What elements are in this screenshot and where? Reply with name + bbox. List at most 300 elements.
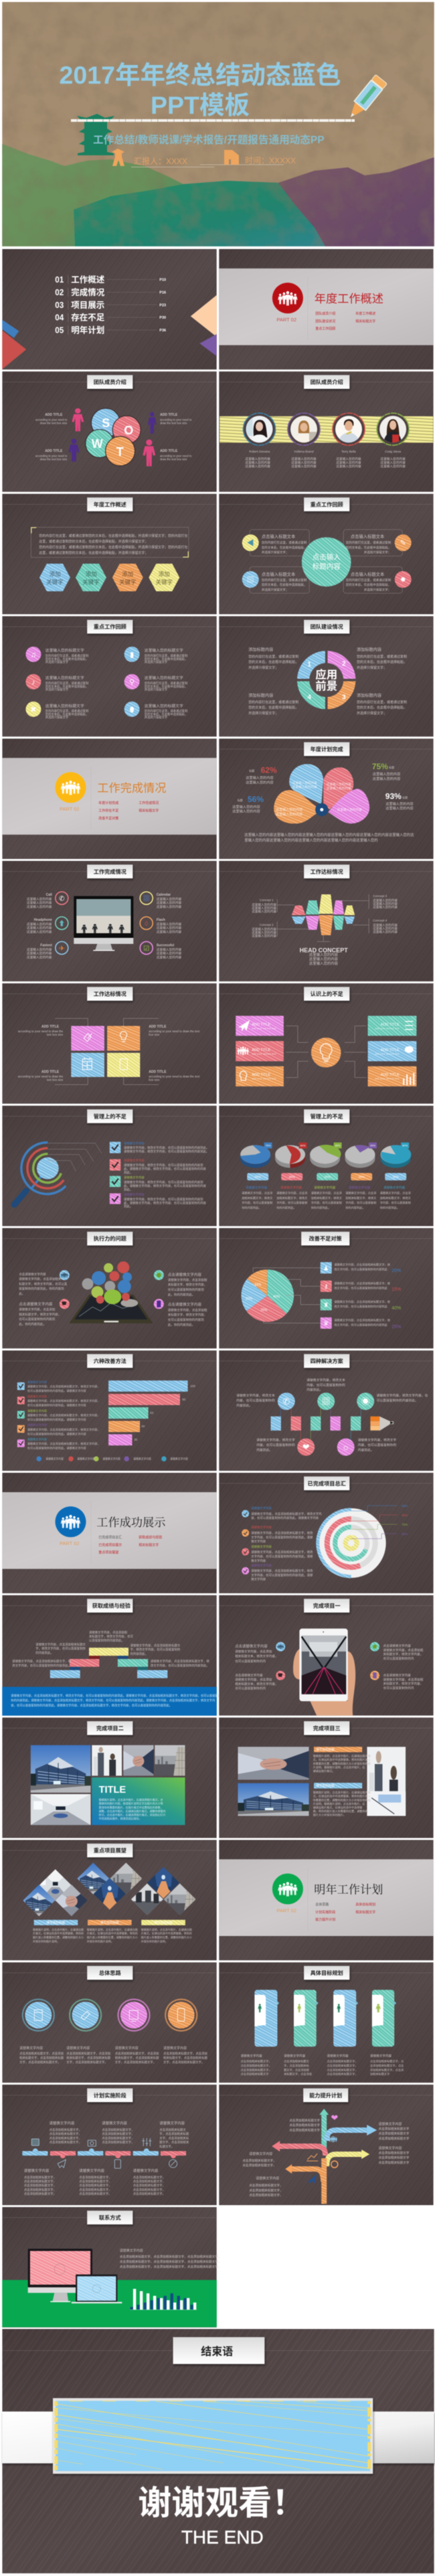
part list: 年度计划完成: [98, 801, 118, 805]
heading: 执行力的问题: [94, 1235, 126, 1242]
keyword hexagons: 关键字: [46, 579, 64, 586]
heading: 工作达标情况: [94, 991, 127, 997]
contact text: 点击添加相关标题文字，点击添加相关标题文字，点击添加相关标题文字，: [120, 2255, 221, 2258]
reporter text: 汇报人：XXXX: [134, 156, 187, 166]
percent callouts: 标题: [249, 769, 254, 773]
pie chart: 20%: [246, 1297, 253, 1301]
panel: improvement pie slide: [219, 1228, 434, 1348]
member names and text: Craig Steva: [385, 450, 402, 453]
part list: 能力提升计划: [315, 1917, 335, 1922]
hand holding device: [293, 1629, 355, 1716]
panel: awareness shortfalls slide: [219, 983, 434, 1104]
six text blocks: 您的文本后，在此框中选择粘贴，: [46, 684, 88, 689]
left text blocks: 这里输入您的内容: [27, 951, 52, 956]
heading: 完成项目一: [313, 1603, 341, 1609]
signpost text: [242, 2118, 410, 2198]
portrait four: [377, 413, 409, 445]
four text blocks: 您的内容打在这里，或者通过复制: [357, 655, 407, 659]
item text: 请替换文字内容，点击添加相关标题文字，修改文字内容，: [27, 1428, 100, 1431]
icon: pencil: [345, 74, 387, 122]
swot diagram: W: [92, 437, 103, 451]
right text: 请替换文字内容，点击添加相: [168, 1278, 207, 1281]
right text blocks: 这里输入您的内容: [157, 904, 182, 909]
box text: 并选择只保留文字；: [262, 550, 288, 555]
four text blocks: 您的内容打在这里，或者通过复制: [248, 655, 298, 659]
heading: [304, 620, 349, 633]
right text blocks: 这里输入您的内容: [157, 926, 182, 931]
caption text: 替换图片说明，点击选中图片，右键调出图: [33, 1928, 84, 1931]
item text: 请替换文字内容: [27, 1423, 47, 1427]
lower text: 点击添加相关标题文字，: [133, 2179, 165, 2184]
part title: 明年工作计划: [314, 1882, 383, 1896]
box text: 点击输入标题文本: [351, 571, 385, 577]
icons: outlined circles: [56, 892, 153, 955]
icons: solution badges: ❤: [302, 1442, 310, 1452]
lower text: 点击添加相关标题文字，: [24, 2187, 56, 2192]
four labels: ADD TITLE: [149, 1070, 167, 1074]
six text blocks: 您的文本后，在此框中选择粘贴，: [46, 657, 88, 661]
upper text: 点击添加相关标题文字，: [102, 2136, 135, 2140]
icons: six badges: ▮: [130, 651, 134, 659]
contents list: P30: [159, 316, 166, 320]
icons: six badges: ♪: [31, 678, 35, 686]
left text: 请替换文字内容，点击添加: [19, 1307, 55, 1311]
part label: PART 02: [60, 806, 80, 812]
caption bars: 填写您的标题: [154, 1921, 173, 1925]
right text: 点击请替换文字内容: [383, 1673, 411, 1678]
upper text: 点击添加相关标题文字，: [102, 2140, 135, 2145]
caption bars: [34, 1920, 185, 1925]
concept labels: 这里输入您的内容: [373, 929, 398, 935]
icons: outlined circles: ◊: [145, 920, 148, 928]
box text: 点击输入标题文本: [351, 534, 385, 540]
column text: 相关标题文字，点击添加相关标题: [19, 2055, 64, 2060]
left text: 相关标题文字，修改文字内容，: [19, 1312, 61, 1317]
percent callouts: 标题: [402, 795, 408, 799]
heading: [87, 497, 133, 511]
six text blocks: 您的文本后，在此框中选择粘贴，: [46, 712, 88, 716]
percent callouts: 标题: [389, 765, 394, 769]
part list: 工作完成情况: [139, 801, 159, 805]
text box: 这里，或者通过复制您的文本后，在此框中选择粘贴，并选择只保留文字；: [39, 550, 148, 555]
check boxes: [110, 1142, 120, 1204]
panel: part divider work completion: [2, 738, 217, 859]
item text: [27, 1380, 100, 1451]
pyramid text: 以直接复制你的内容到此。: [89, 1638, 124, 1643]
part label: PART 02: [276, 317, 296, 323]
percent pills: [247, 1173, 406, 1180]
item text: 也可以直接复制你的内容到此。请替换文字内容: [27, 1446, 86, 1451]
heading: [87, 1109, 133, 1123]
caption text: 图片放入你需要的位置，调整你的图片大小: [141, 1935, 192, 1939]
item text: 请替换文字内容，点击添加相关标题文字，修改: [251, 1532, 313, 1534]
part label: PART 02: [60, 1540, 80, 1546]
part list: 年度工作概述: [355, 311, 375, 316]
left cards: ADD TITLE: [252, 1073, 271, 1077]
column text: 点击添加相关标题文字，点击添加: [66, 2052, 110, 2055]
upper text: [50, 2121, 189, 2149]
percent values: 15%: [392, 1287, 401, 1292]
heading: 管理上的不足: [94, 1113, 126, 1119]
solution text: 内容到此。: [307, 1388, 323, 1392]
part list: [98, 1535, 162, 1555]
contents list: 明年计划: [71, 325, 104, 335]
blue summary band: 请替换文字内容，点击添加相关标题文字，修改文字内容，也可以直接复制你的内容到此。请替换文字内容，点击添加相关标题文字，修改文字内容，也可以直接复制: [11, 1694, 221, 1697]
item text: 容，也可以直接复制你的内容到此。请替换文字内容: [251, 1516, 319, 1520]
right text: 点击请替换文字内容: [168, 1301, 201, 1307]
right cards: add your demos text: [375, 1076, 400, 1080]
panel: management pies slide: [219, 1106, 434, 1226]
box text: 您的内容打在这里，或者通过复制: [346, 578, 391, 582]
left text: 点击请替换文字内容: [235, 1643, 268, 1649]
pie text columns: [242, 1186, 412, 1210]
pie text columns: 你的内容到此。: [276, 1205, 296, 1210]
part list: 重点工作回顾: [315, 327, 335, 331]
six text blocks: 并选择只保留文字: [46, 715, 68, 720]
upper text: 点击添加相关标题文字，: [102, 2131, 135, 2136]
item text: [124, 1141, 209, 1209]
heading: 能力提升计划: [309, 2092, 342, 2099]
column text: 点击添加相关标题文字，: [241, 2060, 272, 2063]
summary text: 这里输入您的内容这里输入您的内容这里输入您的内容这里输入您的内容这里输入您的内容这里输入您的这: [244, 833, 414, 837]
heading: [304, 1109, 349, 1123]
column text: 点击添加相关标题文字，: [241, 2063, 272, 2068]
percent values: 25%: [392, 1325, 401, 1330]
upper text: 点击添加相关标题文字，: [50, 2128, 82, 2131]
icons: solution badges: ◉: [361, 1396, 370, 1406]
item text: 请替换文字内容: [27, 1394, 47, 1399]
four text blocks: 您的内容打在这里，或者通过复制: [248, 700, 298, 704]
right text: [383, 1643, 424, 1690]
lower text: 请替换文字内容: [133, 2168, 159, 2173]
pie text columns: 字内容，也可以直接复制: [276, 1200, 307, 1205]
part list: 获取成绩与经验: [139, 1535, 162, 1540]
heading: 完成项目三: [313, 1724, 341, 1731]
heading: [87, 1232, 133, 1245]
item text: 请替换文字内容，点击添加相关标题文字，修: [334, 1318, 390, 1321]
icon: books: [224, 150, 239, 165]
six text blocks: 这里输入您的标题文字: [145, 703, 183, 708]
portrait two: [288, 413, 320, 445]
item text: 换文字内容: [251, 1558, 266, 1563]
member names and text: 这里输入您的内容: [245, 457, 270, 461]
contact text: 请替换文字内容: [120, 2248, 143, 2253]
panel: project two photo slide: [2, 1718, 217, 1838]
four text blocks: 并选择只保留文字；: [248, 711, 278, 716]
head concept: [300, 947, 348, 966]
lower text: 点击添加相关标题文字，: [133, 2187, 165, 2192]
orange caption: 键调出图片格式。: [313, 1769, 335, 1773]
bar chart: [108, 1380, 195, 1445]
right text: 请替换文字内容，点击添加相: [383, 1648, 423, 1652]
text box: 这里，或者通过复制您的文本后，在此框中选择粘贴，并选择只保留文字；: [39, 540, 148, 544]
percent callouts: 这里输入您的内容: [232, 805, 260, 809]
pie text columns: 请替换文字内容，点击添: [345, 1192, 376, 1195]
item text: 请替换文字内容，修改文字内容，也可以直接复制你的内容到: [124, 1163, 203, 1167]
four labels: box size: [149, 1033, 160, 1036]
pyramid blocks: [50, 1647, 167, 1678]
lower text: 点击添加相关标题文字。: [133, 2192, 165, 2196]
item text: 文字内容，也可以直接复制你的内容到此。请替: [251, 1573, 313, 1577]
item text: [334, 1262, 391, 1327]
heading: 团队建设情况: [311, 623, 344, 630]
caption text: 片格式，在弹出的选中中选择替换，将你的: [87, 1931, 138, 1935]
icon: team badge: [272, 283, 303, 313]
blue summary band: [2, 1687, 221, 1716]
upper text: 点击添加相关标题文字，: [50, 2136, 82, 2140]
part list: [315, 311, 375, 331]
lower text: 点击添加相关标题文字，: [24, 2176, 56, 2179]
right text: 也可以直接复制你的内: [383, 1686, 414, 1690]
icons: side badges: [276, 1642, 379, 1680]
concept labels: 这里输入您的内容: [252, 933, 276, 939]
solution text: 请替换文字内容，修改文本: [307, 1379, 345, 1382]
gradient title card: [92, 1777, 185, 1825]
chalk underline: [71, 119, 355, 122]
right text: 请替换文字内容，点击添加相: [383, 1678, 423, 1681]
icons: six badges: ✖: [30, 706, 37, 714]
panel: contact slide: [2, 2207, 221, 2328]
right cards: add your demos text: [375, 1026, 400, 1030]
panel: part divider annual overview: [219, 249, 434, 370]
flower chart: 这里输入您的内容: [292, 785, 317, 789]
solution text: 内容，也可以直接复制你的: [307, 1382, 345, 1387]
six text blocks: 您的内容打在这里，或者通过复制: [46, 709, 88, 712]
member names and text: 这里输入您的内容: [245, 460, 270, 465]
pillar diagram: [292, 894, 355, 935]
column text: 点击添加相关标题文字，: [327, 2060, 358, 2063]
six text blocks: 您的内容打在这里，或者通过复制: [46, 654, 88, 657]
icons: square badges: ♛: [323, 1319, 329, 1326]
concept labels: 这里输入您的内容: [252, 928, 276, 931]
panel: execution tablet slide: [2, 1228, 217, 1348]
heading: [304, 987, 349, 1001]
percent pills: 20%: [289, 1176, 295, 1179]
panel: swot team slide: [2, 372, 217, 492]
upper text: 点击添加相关标题文字，: [50, 2131, 82, 2136]
timeline: [22, 2148, 186, 2158]
add title text: ADD TITLE: [160, 413, 178, 417]
column text: 相关标题文字，点击添加相关标题: [115, 2055, 159, 2060]
pie four: [345, 1143, 377, 1168]
six text blocks: 这里输入您的标题文字: [145, 647, 183, 653]
right text blocks: [157, 893, 182, 959]
icon: team badge: [55, 1506, 86, 1537]
panel: annual plan flower slide: [219, 738, 434, 859]
yellow band: [220, 416, 433, 442]
right text blocks: 这里输入您的内容: [157, 955, 182, 959]
photo collage: [31, 1745, 185, 1825]
item text: 请替换文字内容: [27, 1380, 47, 1384]
item text: 请替换文字内容，点击添加相关标题文字，修改: [251, 1569, 313, 1573]
box text: 点击输入标题文本: [262, 571, 296, 577]
four labels: text box size: [47, 1033, 64, 1036]
heading: 具体目标规划: [311, 1969, 343, 1976]
monitor: [74, 896, 133, 951]
connector lines: [55, 1018, 159, 1084]
pie text columns: 请替换文字内容: [314, 1186, 336, 1190]
column text: 点击添加相关标题文字，: [327, 2063, 358, 2068]
left text: 相关标题文本，修改文字内容，: [235, 1654, 278, 1659]
the end text: THE END: [181, 2526, 264, 2548]
centre circle: 点击输入: [313, 554, 341, 562]
right text blocks: 这里输入您的内容: [157, 929, 182, 934]
six text blocks: 您的文本后，在此框中选择粘贴，: [145, 684, 187, 689]
orange caption: 填写您的标题: [316, 1747, 335, 1752]
icon: team badge: [55, 772, 86, 803]
pie text columns: 请替换文字内容: [246, 1186, 268, 1190]
left text: 也可以直接复制你的内: [235, 1686, 266, 1690]
pyramid text: 请替换文字内容，点击添加相: [89, 1631, 127, 1634]
heading: 计划实施阶段: [94, 2092, 126, 2099]
pyramid text: 请替换文字内容，点击添加相关标题文: [130, 1643, 180, 1647]
four labels: according to your need to draw the text: [149, 1030, 199, 1033]
column text: 请替换文字内容: [163, 2046, 187, 2050]
left cards: ADD TITLE: [252, 1023, 271, 1027]
icons: outlined circles: ☑: [143, 945, 149, 953]
contents list: 05: [55, 325, 64, 335]
upper text: 字，点击添加相关标题: [159, 2131, 189, 2136]
add title text: according to your need to: [35, 418, 67, 421]
contact text: 点击添加相关标题文字，点击添加相关标题文字，点击添加相关标题文字，: [120, 2264, 221, 2269]
item text: 换文字内容: [251, 1539, 266, 1544]
contents list: 项目展示: [71, 301, 104, 310]
solution text: 内容到此。: [358, 1447, 374, 1452]
heading: [304, 1477, 349, 1490]
left text: 点击请替换文字内容: [19, 1301, 53, 1307]
concept labels: 这里输入您的内容: [373, 927, 398, 931]
caption text: 并保存你的图片说明。: [141, 1939, 168, 1943]
upper text: 文字，点击添加相关标: [159, 2136, 189, 2140]
white band: [2, 2411, 434, 2464]
solution text: 请替换文字内容，修改文字内容，也: [377, 1394, 428, 1398]
left text: 此。你的内容到此。: [19, 1322, 46, 1327]
column text: 关标题文字，点击添加: [284, 2072, 312, 2077]
percent pills: 20%: [255, 1176, 261, 1179]
part list: 相关标题文字: [139, 1542, 159, 1547]
pie two: 60%: [300, 1144, 306, 1147]
heading: 完成项目二: [96, 1724, 124, 1731]
right cards: add your demos text: [375, 1052, 400, 1055]
column text: 题文字，点击添加相: [284, 2067, 309, 2072]
flower chart: 这里输入您的内容: [327, 783, 351, 786]
heading: 重点工作回顾: [311, 501, 343, 507]
column text: 添加相关标题文字，点击添: [370, 2067, 404, 2072]
part label: PART 02: [276, 1907, 296, 1913]
blue summary band: 容，也可以直接复制你的内容到此。请替换文字内容，点击添加相关标题文字，修改文字内容，也可以直接复制你的内容到此。: [11, 1703, 172, 1708]
panel: achievements pyramid slide: [2, 1595, 221, 1716]
solution text: 请替换文字内容，修改文字: [256, 1439, 295, 1443]
four labels: ADD TITLE: [41, 1025, 60, 1029]
heading: [87, 2089, 133, 2102]
item text: 请替换文字内容: [251, 1544, 272, 1549]
item text: 此。请替换文字内容，修改文字内容，也可以直接复制你的内容: [124, 1200, 207, 1205]
heading: 团队成员介绍: [94, 379, 126, 386]
icons: signpost badges: [307, 2113, 338, 2184]
heading: 四种解决方案: [311, 1358, 344, 1364]
heading: 管理上的不足: [311, 1113, 343, 1119]
lower text: 点击添加相关标题文字，: [133, 2183, 165, 2188]
item text: 请替换文字内容: [27, 1437, 47, 1442]
bar chart: 53: [150, 1411, 154, 1415]
icons: square badges: ♜: [323, 1301, 329, 1308]
six text blocks: 这里输入您的标题文字: [46, 675, 84, 680]
leader values: 60%: [402, 1532, 408, 1536]
icons: square badges: ♟: [323, 1265, 329, 1271]
pie text columns: 请替换文字内容: [280, 1186, 302, 1190]
four text blocks: 您的文本后，在此框中选择粘贴，: [248, 660, 298, 665]
column text: 点击添加相关标题文字: [241, 2072, 268, 2077]
box text: 并选择只保留文字；: [364, 550, 391, 555]
four cards: [254, 1990, 396, 2046]
left text blocks: 这里输入您的内容: [27, 955, 52, 959]
percent pills: 20%: [359, 1176, 365, 1179]
panel: part divider achievements: [2, 1473, 217, 1593]
upper text: 请替换文字内容: [159, 2121, 185, 2126]
icons: corner badges: ✎: [400, 540, 406, 548]
part list: 团队成员介绍: [315, 311, 335, 316]
part list: 改善不足对策: [98, 816, 118, 821]
pie text columns: 加相关标题文字，修改文: [380, 1196, 412, 1200]
part list: 已完成项目总汇: [98, 1535, 122, 1540]
pie chart: [241, 1269, 294, 1322]
text box: 您的内容打在这里，或者通过复制您的文本后，在此框中选择粘贴，并选择只保留文字；您的内容打在: [39, 535, 187, 538]
six text blocks: [46, 647, 187, 720]
diamond photos: [23, 1862, 196, 1916]
box text: 并选择只保留文字；: [364, 587, 391, 592]
pie text columns: 请替换文字内容，点击添: [311, 1192, 342, 1195]
panel: completed projects target slide: [219, 1473, 434, 1593]
upper text: 点击添加相关标题文: [159, 2128, 186, 2131]
right text: 也可以直接复制你的内容到: [168, 1287, 204, 1292]
item text: 请替换文字内容: [27, 1408, 47, 1413]
icons: outline line set: [31, 2138, 177, 2168]
gradient title card: 样式，点击选中图片，右键选择图片格式，添加到幻灯片: [99, 1813, 166, 1817]
part list: 已完成项目展示: [98, 1542, 122, 1547]
pyramid text: 改文字内容，也可以直接复制你的内容到此。: [151, 1664, 209, 1668]
four text blocks: 添加标题内容: [357, 647, 381, 652]
right text blocks: 这里输入您的内容: [157, 922, 181, 926]
percent callouts: 62%: [261, 766, 277, 775]
heading: [87, 375, 133, 389]
pie four: 30%: [370, 1144, 375, 1147]
concept labels: Concept 1: [260, 898, 274, 902]
heading: 重点项目展望: [94, 1847, 126, 1854]
part list: [315, 1902, 375, 1922]
six text blocks: 您的文本后，在此框中选择粘贴，: [145, 657, 187, 661]
solution text: [236, 1378, 428, 1453]
box text: 您的内容打在这里，或者通过复制: [262, 541, 307, 544]
part list: 重点项目展望: [98, 1550, 118, 1555]
signpost text: 点击添加相关标题文字: [379, 2136, 410, 2141]
member names and text: [245, 450, 406, 469]
heading: 工作完成情况: [94, 868, 127, 875]
member names and text: 这里输入您的内容: [380, 464, 406, 469]
icons: signpost badges: ❤: [331, 2113, 338, 2123]
left text: 标题文字，修改文字内容，也可以直: [19, 1281, 68, 1286]
panel: skills signpost slide: [219, 2085, 434, 2205]
blue caption: 填写您的标题: [316, 1783, 335, 1788]
left text: 请替换文字内容，点击添加相关: [19, 1277, 61, 1281]
panel: team building slide: [219, 616, 434, 736]
portrait three: [333, 413, 365, 445]
four text blocks: 添加标题内容: [357, 693, 381, 698]
add title text: according to your need to: [160, 418, 191, 421]
icons: six badges: ⚲: [129, 678, 135, 686]
heading: [301, 1232, 349, 1245]
heading: [87, 1354, 133, 1368]
column text: 点击添加相关标题文字，: [327, 2072, 358, 2077]
